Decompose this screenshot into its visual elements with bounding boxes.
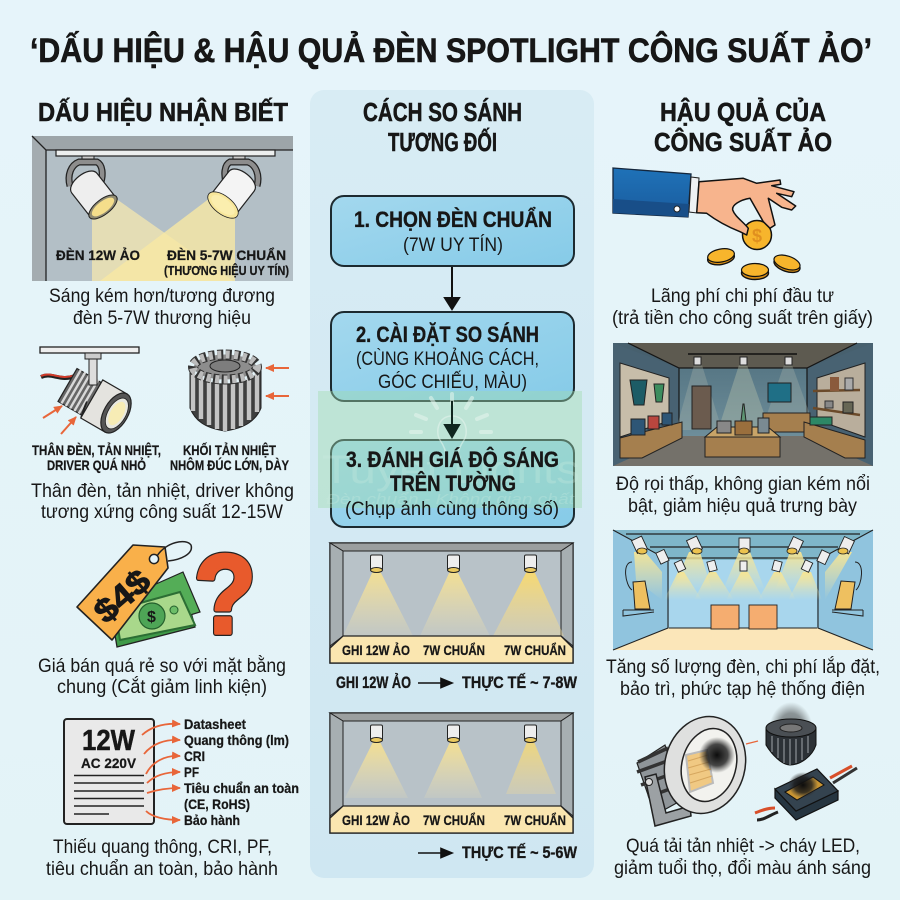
step 3 text — [345, 447, 559, 520]
illustration: comparing two track lights: (THƯƠNG HIỆU UY TÍN) — [164, 263, 289, 278]
caption: brightness — [49, 286, 275, 329]
result 2: 5-6W: THỰC TẾ ~ 5-6W — [462, 843, 578, 862]
label: undersized parts — [32, 441, 161, 473]
label: undersized parts: THÂN ĐÈN, TẢN NHIỆT, — [32, 441, 161, 458]
step 2 box — [331, 312, 574, 401]
caption: wasted investment — [612, 286, 873, 329]
heading: consequences: HẬU QUẢ CỦA — [660, 96, 826, 127]
labels: missing specifications: (CE, RoHS) — [184, 796, 250, 812]
illustration: comparing two track lights: ĐÈN 5-7W CHUẨN — [167, 246, 286, 263]
caption: more lights — [606, 656, 880, 700]
arrows: large heatsink — [266, 368, 289, 396]
icon: spec sheet — [64, 719, 154, 824]
step 2 box: 2. CÀI ĐẶT SO SÁNH — [356, 322, 539, 347]
caption: more lights: bảo trì, phức tạp hệ thống điện — [620, 679, 865, 700]
result 2: 5-6W — [418, 843, 578, 862]
caption: overheating: Quá tải tản nhiệt -> cháy LED, — [626, 836, 860, 857]
icon: large cast heatsink — [190, 354, 261, 431]
labels: missing specifications: PF — [184, 764, 199, 780]
caption: missing specs — [46, 837, 278, 880]
heading: consequences: CÔNG SUẤT ẢO — [654, 127, 832, 157]
heading: comparison — [363, 97, 522, 157]
labels: missing specifications: Tiêu chuẩn an toàn — [184, 780, 299, 796]
result 1: 7-8W: GHI 12W ẢO — [336, 673, 411, 692]
caption: wasted investment: Lãng phí chi phí đầu tư — [651, 286, 834, 307]
icon: undersized spotlight — [40, 347, 139, 438]
panel: signs column — [31, 97, 299, 880]
caption: low illuminance — [616, 474, 870, 517]
label: proper heatsink — [170, 441, 290, 473]
heading: consequences — [654, 96, 832, 157]
caption: low illuminance: Độ rọi thấp, không gian kém nổi — [616, 474, 870, 495]
step 1 box — [331, 196, 574, 266]
icon: spec sheet: AC 220V — [81, 755, 137, 771]
icon: price tag and money — [77, 542, 200, 647]
labels: missing specifications: CRI — [184, 748, 205, 764]
result 1: 7-8W — [336, 673, 578, 692]
icon: price tag and money: $ — [147, 609, 156, 626]
label: proper heatsink: KHỐI TẢN NHIỆT — [183, 441, 276, 458]
labels: missing specifications: Quang thông (lm) — [184, 732, 289, 748]
illustration: comparing two track lights: ĐÈN 12W ẢO — [56, 247, 140, 263]
panel: comparison method — [310, 90, 594, 878]
caption: body mismatch: tương xứng công suất 12-15W — [41, 502, 283, 523]
caption: overheating — [614, 836, 871, 879]
labels: missing specifications: Bảo hành — [184, 812, 240, 828]
icon: question mark: ? — [194, 532, 256, 657]
illustration: hand dropping coins: $ — [752, 226, 762, 246]
step 3 text: TRÊN TƯỜNG — [390, 471, 516, 496]
heading: comparison: CÁCH SO SÁNH — [363, 97, 522, 127]
label: proper heatsink: NHÔM ĐÚC LỚN, DÀY — [170, 456, 290, 473]
labels: missing specifications — [184, 716, 299, 828]
scene 2: three lights on wall: 7W CHUẨN — [423, 811, 485, 828]
heading: comparison: TƯƠNG ĐỐI — [388, 127, 497, 157]
result 1: 7-8W: THỰC TẾ ~ 7-8W — [462, 673, 578, 692]
label: undersized parts: DRIVER QUÁ NHỎ — [47, 456, 146, 473]
scene 2: three lights on wall: GHI 12W ẢO — [342, 812, 410, 828]
caption: wasted investment: (trả tiền cho công suất trên giấy) — [612, 308, 873, 329]
caption: price — [38, 655, 286, 698]
step 3 text: 3. ĐÁNH GIÁ ĐỘ SÁNG — [346, 447, 559, 472]
icon: spec sheet: 12W — [82, 725, 136, 757]
caption: price: Giá bán quá rẻ so với mặt bằng — [38, 655, 286, 677]
scene 2: three lights on wall — [330, 713, 573, 833]
illustration: burned LED spotlight — [637, 702, 857, 826]
watermark: Tuyết Lights — [322, 448, 580, 492]
arrows: small body — [43, 406, 76, 434]
caption: missing specs: Thiếu quang thông, CRI, PF, — [53, 837, 272, 858]
caption: overheating: giảm tuổi thọ, đổi màu ánh sáng — [614, 858, 871, 879]
arrow: step 1 to 2 — [445, 267, 459, 309]
step 1 box: (7W UY TÍN) — [403, 235, 503, 256]
caption: brightness: Sáng kém hơn/tương đương — [49, 286, 275, 307]
panel: consequences column — [606, 96, 880, 879]
scene 1: three lights on wall: 7W CHUẨN — [504, 641, 566, 658]
scene 1: three lights on wall: 7W CHUẨN — [423, 641, 485, 658]
arrow: step 2 to 3 — [445, 401, 459, 437]
caption: more lights: Tăng số lượng đèn, chi phí lắp đặt, — [606, 656, 880, 678]
icon: price tag and money: $4$ — [86, 562, 157, 630]
scene 1: three lights on wall — [330, 543, 573, 663]
scene 1: three lights on wall: GHI 12W ẢO — [342, 642, 410, 658]
illustration: dim shop interior — [613, 343, 873, 466]
caption: body mismatch: Thân đèn, tản nhiệt, driver không — [31, 481, 294, 502]
step 2 box: (CÙNG KHOẢNG CÁCH, — [356, 348, 539, 370]
illustration: comparing two track lights — [32, 136, 293, 281]
arrows: spec sheet to missing items — [142, 724, 180, 820]
step 3 box background — [331, 440, 574, 527]
caption: body mismatch — [31, 481, 294, 523]
illustration: hand dropping coins — [613, 168, 802, 280]
step 2 box: GÓC CHIẾU, MÀU) — [378, 371, 527, 393]
illustration: many lights in store — [613, 530, 873, 650]
watermark: Đèn chuẩn - Không gian chất — [326, 491, 575, 508]
icon: question mark: ? — [194, 532, 256, 657]
caption: low illuminance: bật, giảm hiệu quả trưng bày — [628, 496, 857, 517]
watermark — [318, 391, 582, 508]
step 1 box: 1. CHỌN ĐÈN CHUẨN — [354, 207, 552, 232]
scene 2: three lights on wall: 7W CHUẨN — [504, 811, 566, 828]
caption: missing specs: tiêu chuẩn an toàn, bảo hành — [46, 859, 278, 880]
heading: signs: DẤU HIỆU NHẬN BIẾT — [38, 97, 288, 127]
caption: brightness: đèn 5-7W thương hiệu — [73, 308, 251, 329]
caption: price: chung (Cắt giảm linh kiện) — [57, 676, 267, 698]
step 3 text: (Chụp ảnh cùng thông số) — [345, 499, 559, 520]
labels: missing specifications: Datasheet — [184, 716, 246, 732]
